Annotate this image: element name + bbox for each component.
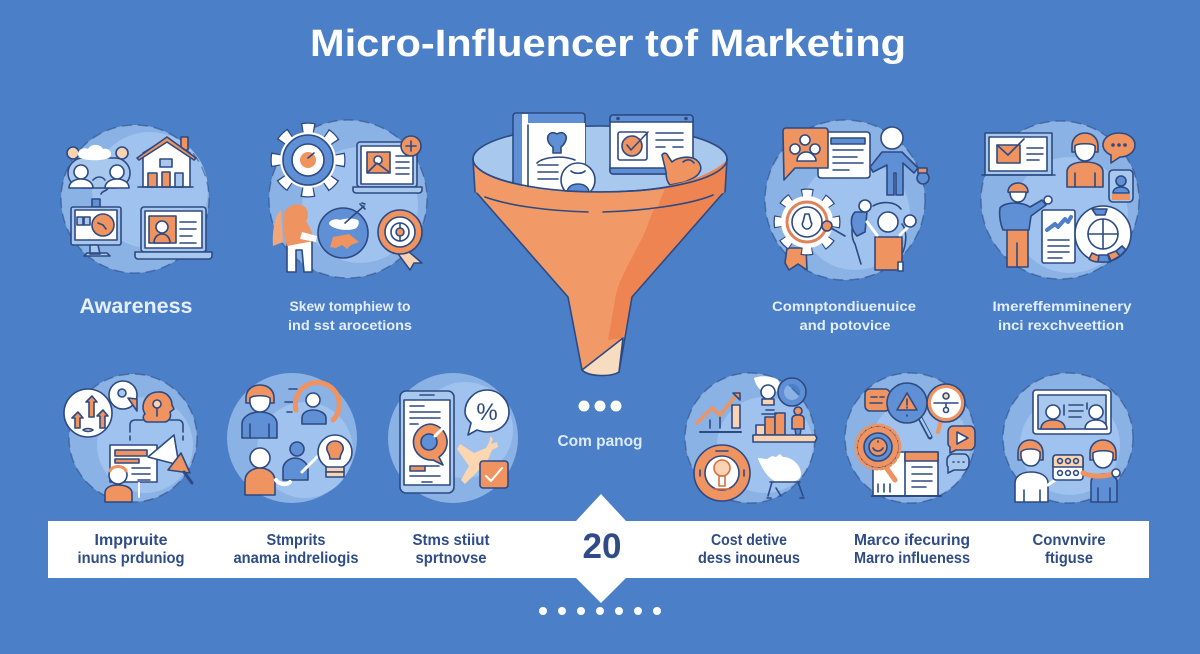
label: awareness: Awareness xyxy=(80,295,192,318)
title: Micro-Influencer tof Marketing xyxy=(310,23,906,65)
center dots xyxy=(578,400,622,412)
banner item four: Cost detive xyxy=(711,532,787,549)
icon: person top left xyxy=(242,385,277,438)
label: strategy right line two: and potovice xyxy=(800,317,891,333)
icon: person left xyxy=(1015,440,1048,502)
icon: report sheet xyxy=(1042,210,1075,263)
icon: laptop with plus badge xyxy=(353,136,422,193)
label: efficiency line two: inci rexchveettion xyxy=(998,317,1124,333)
icon: card and megaphone xyxy=(110,435,192,483)
pagination dots xyxy=(539,607,661,615)
panel: bottom icons row one xyxy=(64,374,197,502)
icon: head with ring xyxy=(754,376,806,406)
banner item two: anama indreliogis xyxy=(234,550,359,567)
icon: presenter with chart xyxy=(1000,183,1052,267)
icon: orange person xyxy=(1067,133,1103,187)
panel: bottom icons row six xyxy=(1003,373,1133,503)
banner item three: Stms stiiut xyxy=(412,532,490,549)
icon: person with headset xyxy=(105,466,139,502)
icon: orange head with connectors xyxy=(130,392,183,440)
icon: people with cloud xyxy=(67,145,130,194)
banner item three: sprtnovse xyxy=(416,550,487,567)
icon: bars on shelf with person xyxy=(753,407,817,442)
panel: efficiency icon cluster xyxy=(981,121,1139,279)
icon: play bubble xyxy=(948,426,975,453)
icon: inspect magnifier xyxy=(927,384,965,432)
icon: monitor xyxy=(71,199,121,256)
icon: percent bubble: % xyxy=(476,399,498,426)
banner item five: Marro influeness xyxy=(854,550,970,567)
panel: community icon cluster xyxy=(765,120,929,280)
icon: bag with check xyxy=(457,436,508,488)
icon: gear with ribbon xyxy=(774,189,845,270)
panel: bottom icons row two xyxy=(227,373,357,503)
panel: bottom icons row three xyxy=(388,373,518,503)
icon: orange note bubble xyxy=(865,389,890,411)
icon: round badge with arrow xyxy=(318,203,368,258)
icon: warning magnifier xyxy=(887,383,930,437)
icon: person with backpack xyxy=(273,204,317,272)
icon: speech bubble xyxy=(1103,133,1135,163)
icon: growth chart xyxy=(697,393,741,432)
icon: medal xyxy=(378,210,422,270)
banner item six: ftiguse xyxy=(1045,550,1093,567)
banner item four: dess inouneus xyxy=(698,550,800,567)
rim interior xyxy=(473,126,727,192)
icon: video call screen xyxy=(1033,390,1111,434)
icon: white blob on stand xyxy=(758,454,804,498)
panel: awareness icon cluster xyxy=(61,125,212,273)
label: efficiency: Imereffemminenery xyxy=(992,298,1132,314)
banner item one: Imppruite xyxy=(94,532,168,549)
icon: group of people xyxy=(851,200,916,271)
banner item five: Marco ifecuring xyxy=(854,532,970,549)
icon: white text card xyxy=(818,132,870,178)
icon: chat bubble xyxy=(947,454,969,473)
number in badge: 20 xyxy=(582,527,622,566)
icon: email screen xyxy=(982,133,1055,175)
funnel xyxy=(473,113,727,376)
funnel band xyxy=(473,159,727,212)
label: center: Com panog xyxy=(558,433,642,450)
icon: keypad card xyxy=(1048,455,1083,485)
panel: bottom icons row five xyxy=(845,373,975,503)
panel: bottom icons row four xyxy=(685,373,817,503)
label: strategy text line two: ind sst arocetions xyxy=(288,317,412,333)
icon: group speech bubble xyxy=(783,128,828,180)
diamond badge xyxy=(576,494,626,603)
label: strategy text: Skew tomphiew to xyxy=(290,298,410,314)
icon: wheel with crosshair xyxy=(1075,206,1131,262)
banner item two: Stmprits xyxy=(266,532,326,549)
icon: book document xyxy=(513,113,595,197)
icon: up arrows circle xyxy=(64,389,112,437)
banner item six: Convnvire xyxy=(1032,532,1106,549)
icon: bulb ring xyxy=(694,445,750,501)
icon: portrait card xyxy=(1109,170,1133,202)
icon: person right xyxy=(1083,440,1120,502)
icon: check card xyxy=(610,115,701,185)
icon: laptop profile xyxy=(135,207,212,259)
icon: standing presenter xyxy=(870,127,929,195)
icon: smartphone with chart xyxy=(400,391,454,493)
banner item one: inuns prduniog xyxy=(78,550,184,567)
icon: pair of people with bulb xyxy=(245,435,352,495)
icon: person with orange arc xyxy=(285,383,339,424)
icon: small person bubble xyxy=(109,381,137,411)
panel: strategy icon cluster xyxy=(269,120,427,278)
icon: book xyxy=(872,452,941,496)
funnel cone xyxy=(476,192,724,376)
icon: smiling badge xyxy=(856,425,900,480)
banner xyxy=(48,494,1149,603)
icon: house xyxy=(137,137,196,187)
label: strategy right: Comnptondiuenuice xyxy=(772,298,916,314)
icon: gear with target xyxy=(271,123,345,197)
